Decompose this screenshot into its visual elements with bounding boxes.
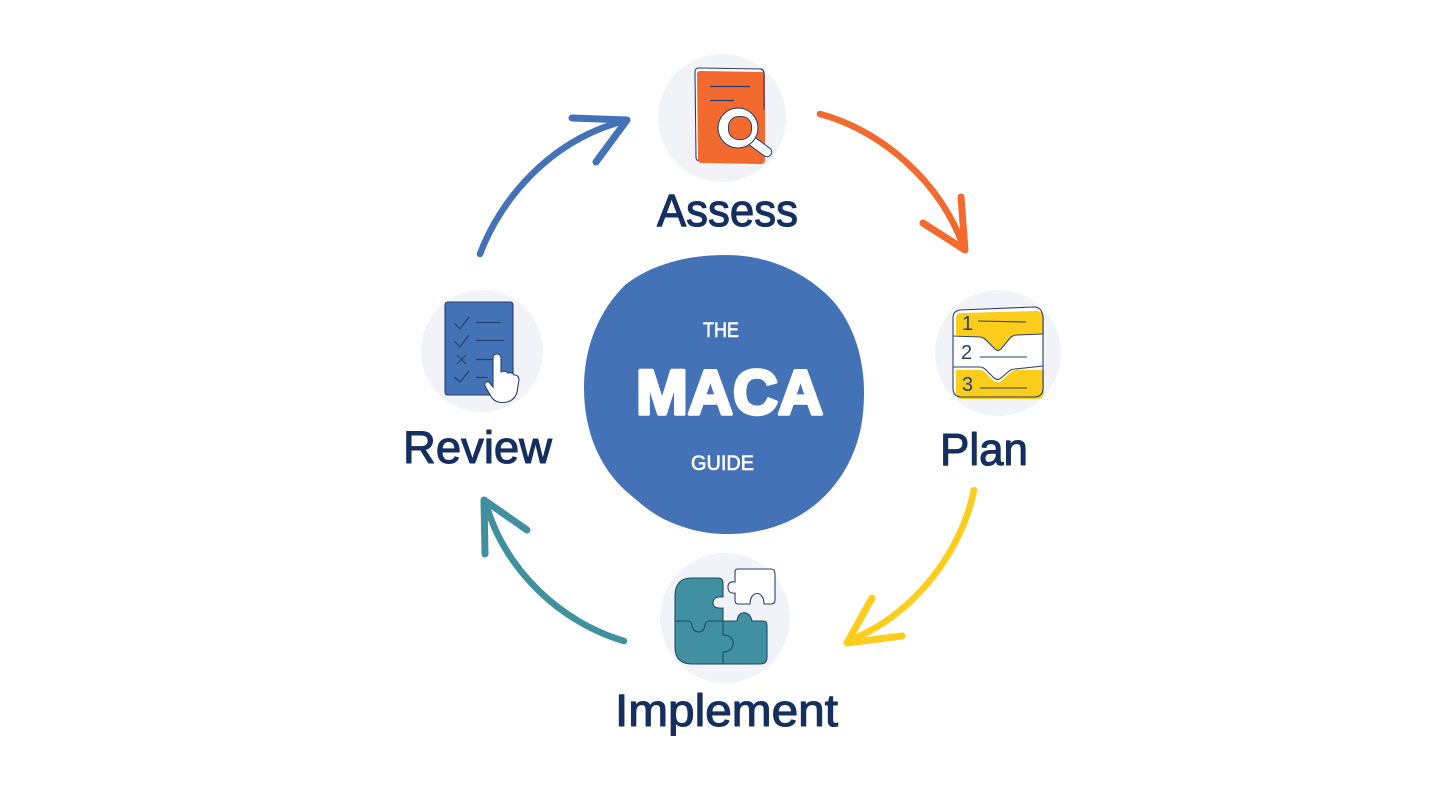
label: Assess: Assess <box>657 185 798 236</box>
numbers <box>961 313 973 396</box>
step: Implement <box>615 553 839 736</box>
numbers: 1 <box>962 313 973 335</box>
icon: puzzle pieces <box>660 553 790 683</box>
heading: THE: THE <box>703 319 739 342</box>
icon: document with magnifier <box>658 54 786 182</box>
numbers: 2 <box>961 342 972 364</box>
icon: numbered plan list <box>935 290 1061 416</box>
step: Review <box>403 290 553 473</box>
label: Plan: Plan <box>940 424 1028 475</box>
heading: MACA: MACA <box>636 358 823 428</box>
arrow: Implement to Review <box>484 500 624 641</box>
step: Assess <box>657 54 798 236</box>
icon: checklist with pointing hand <box>421 290 543 412</box>
label: Implement: Implement <box>615 685 839 736</box>
arrow: Review to Assess <box>480 118 627 254</box>
arrow: Plan to Implement <box>847 490 974 643</box>
central blob: The MACA Guide <box>584 255 864 534</box>
numbers: 3 <box>962 374 973 396</box>
heading: GUIDE: GUIDE <box>691 452 754 475</box>
arrow: Assess to Plan <box>820 114 965 250</box>
label: Review: Review <box>403 422 553 473</box>
step: Plan <box>935 290 1061 475</box>
